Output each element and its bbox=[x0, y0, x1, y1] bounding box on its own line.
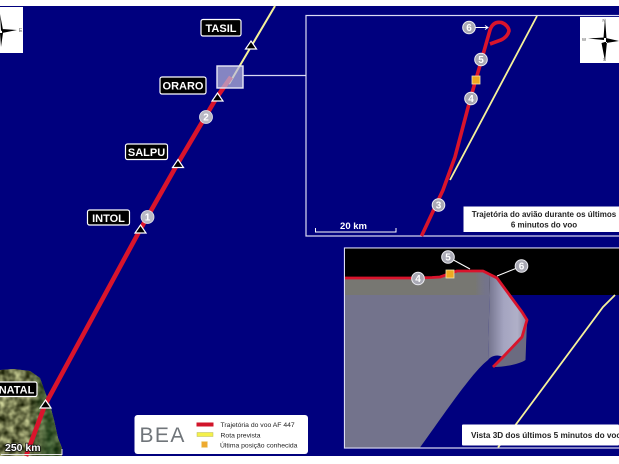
flight path: inset bbox=[422, 22, 509, 236]
compass: inset: W bbox=[582, 37, 587, 42]
last known position square: inset bbox=[472, 76, 480, 84]
compass: main map bbox=[0, 7, 23, 53]
marker 3: 3 bbox=[436, 201, 442, 212]
compass: inset bbox=[580, 17, 619, 63]
caption: 3D view bbox=[462, 424, 619, 446]
land: Brazilian coast near Natal bbox=[0, 369, 62, 456]
marker 6 with leader bbox=[497, 260, 528, 276]
marker 4: 4 bbox=[468, 94, 474, 105]
flight path: main map bbox=[26, 77, 231, 456]
legend: planned route bbox=[197, 432, 261, 439]
marker 6 with arrow bbox=[463, 21, 488, 34]
caption: trajectory inset bbox=[464, 206, 619, 232]
waypoint: INTOL: INTOL bbox=[92, 213, 125, 225]
legend: last known position bbox=[202, 440, 298, 450]
marker 4 bbox=[412, 272, 424, 285]
marker 5 bbox=[475, 53, 487, 66]
legend: flight path: Trajetória do voo AF 447 bbox=[220, 422, 295, 429]
marker 1 bbox=[141, 210, 154, 224]
caption: trajectory inset: Trajetória do avião durante os últimos bbox=[472, 210, 617, 219]
legend panel bbox=[134, 415, 308, 454]
scale bar: 250 km: 250 km bbox=[5, 442, 41, 454]
marker 5: 5 bbox=[478, 55, 484, 66]
waypoint: SALPU bbox=[126, 144, 184, 168]
marker 4: 4 bbox=[415, 274, 421, 285]
black sky bbox=[345, 248, 619, 295]
waypoint: NATAL bbox=[0, 382, 51, 408]
marker 6 with leader: 6 bbox=[519, 262, 525, 273]
zoom box on last known area bbox=[217, 66, 243, 88]
marker 5 with leader: 5 bbox=[445, 253, 451, 264]
caption: 3D view: Vista 3D dos últimos 5 minutos do voo bbox=[471, 431, 619, 440]
waypoint: TASIL: TASIL bbox=[206, 23, 237, 35]
marker 4 bbox=[465, 92, 477, 105]
planned route: 3D view bbox=[498, 295, 615, 448]
last known position square: 3D view bbox=[446, 270, 454, 278]
connector from zoom box to inset bbox=[243, 74, 306, 76]
marker 6 with arrow: 6 bbox=[466, 23, 472, 34]
scale bar: 250 km bbox=[1, 442, 62, 455]
caption: trajectory inset: 6 minutos do voo bbox=[511, 221, 577, 230]
compass: inset: S bbox=[603, 57, 606, 62]
panel: 3D view inset bbox=[344, 248, 619, 448]
legend: last known position: Última posição conhecida bbox=[220, 440, 298, 450]
legend: planned route: Rota prevista bbox=[220, 432, 261, 439]
waypoint: ORARO bbox=[160, 77, 223, 101]
waypoint: SALPU: SALPU bbox=[128, 147, 165, 159]
marker 1: 1 bbox=[145, 213, 151, 224]
waypoint: TASIL bbox=[201, 20, 256, 49]
flight path: 3D view bbox=[345, 271, 527, 367]
panel: last 6 minutes trajectory inset bbox=[306, 16, 619, 236]
waypoint: INTOL bbox=[88, 210, 146, 233]
marker 2: 2 bbox=[203, 113, 209, 124]
scale bar: 20 km: 20 km bbox=[340, 221, 367, 232]
waypoint: ORARO: ORARO bbox=[163, 80, 204, 92]
planned route: inset bbox=[450, 16, 537, 180]
compass: main map: E bbox=[19, 28, 23, 34]
marker 2 bbox=[200, 110, 212, 124]
BEA logo: BEA bbox=[140, 424, 186, 447]
marker 5 with leader bbox=[442, 251, 470, 269]
planned route: main map bbox=[229, 6, 275, 84]
3D trajectory curtain bbox=[345, 271, 527, 448]
compass: inset: N bbox=[602, 18, 606, 23]
scale bar: 20 km bbox=[316, 221, 396, 232]
marker 3 bbox=[432, 199, 445, 212]
